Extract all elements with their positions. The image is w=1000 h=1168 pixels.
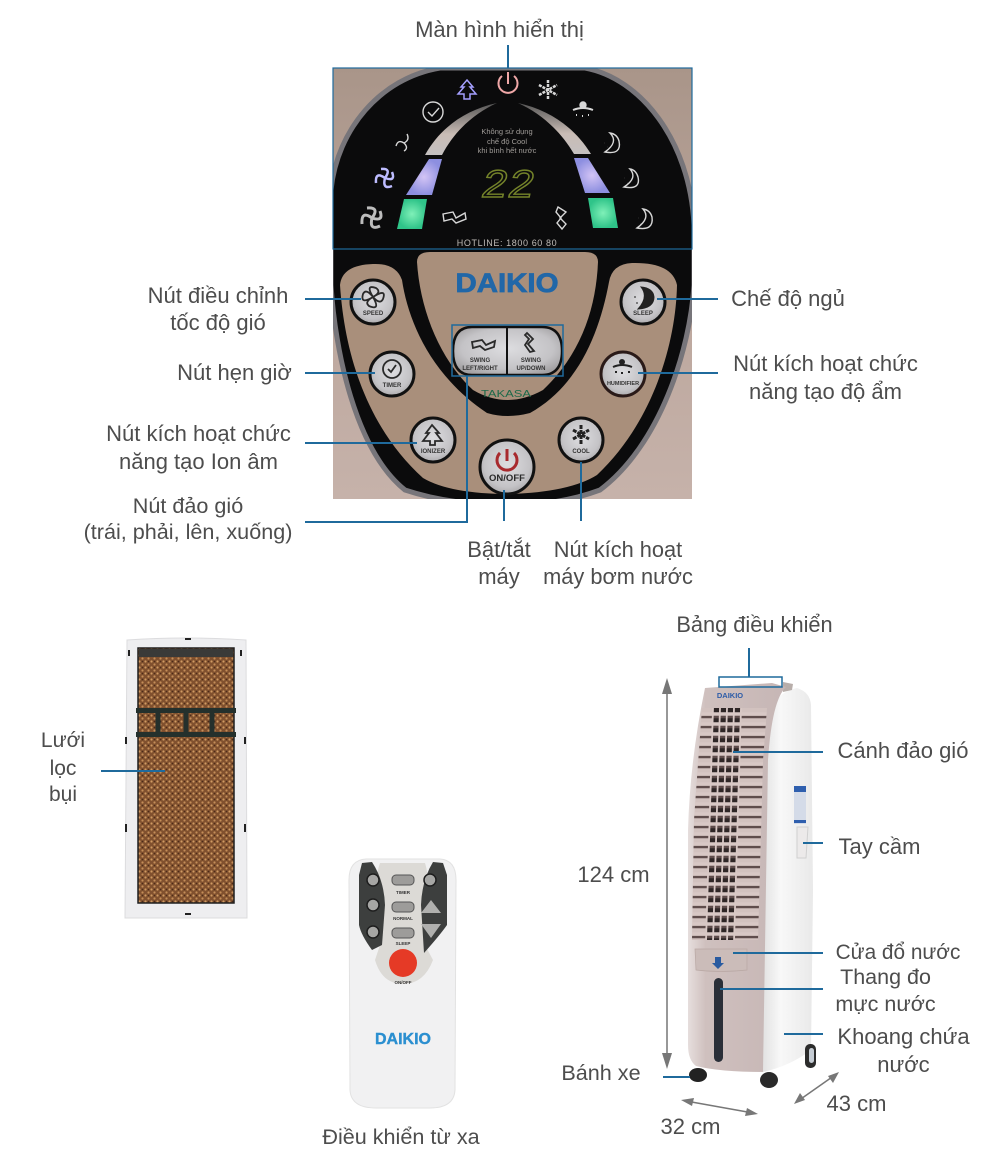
remote power key [389, 949, 417, 977]
button: swing pair [453, 327, 562, 375]
label: water door: Cửa đổ nước [836, 941, 960, 964]
filter frame [125, 638, 247, 918]
display arc: right green segment [588, 198, 618, 228]
width dimension arrow [681, 1098, 758, 1116]
remote center panel [375, 863, 433, 984]
black panel body [331, 68, 694, 505]
product: remote control [349, 859, 456, 1108]
label: ionizer button: Nút kích hoạt chức [106, 421, 291, 446]
label: fan speed button: tốc độ gió [170, 310, 266, 335]
remote logo: DAIKIO [375, 1031, 431, 1048]
label: water tank: Khoang chứa [837, 1024, 970, 1049]
label: swing buttons: Nút đảo gió [133, 493, 243, 518]
cooler white body [763, 688, 813, 1072]
label: water gauge: mực nước [835, 992, 936, 1016]
callout lines: air cooler [663, 648, 823, 1077]
remote key labels: SLEEP [396, 941, 410, 946]
icon: swing left right [443, 212, 466, 223]
depth dimension arrow [794, 1072, 839, 1104]
label: dust filter: bụi [49, 783, 77, 806]
callout lines: control panel [305, 45, 718, 522]
button: humidifier: HUMIDIFIER [607, 381, 639, 387]
panel background [333, 68, 692, 499]
icon: moon medium [624, 169, 638, 188]
height dimension arrow [662, 678, 672, 1069]
label: handle: Tay cầm [839, 834, 920, 859]
hotline: HOTLINE: 1800 60 80 [457, 238, 557, 248]
button: speed: SPEED [363, 311, 384, 317]
cooler grille [690, 705, 770, 945]
Daikio logo: DAIKIO [456, 268, 558, 298]
display note text [478, 128, 536, 153]
rear wheel [805, 1044, 816, 1068]
water level gauge [714, 978, 723, 1062]
button: sleep: SLEEP [633, 311, 653, 317]
dimension: depth: 43 cm [827, 1091, 886, 1116]
label: humidifier button: năng tạo độ ẩm [749, 379, 902, 404]
label: power button: Bật/tắt [467, 537, 531, 562]
icon: ionizer tree [458, 80, 476, 99]
icon: humidifier [573, 102, 593, 116]
display note text: khi bình hết nước [478, 146, 537, 155]
panel: control panel photo [331, 68, 694, 505]
filter top strip [139, 649, 233, 657]
remote bar keys [392, 875, 414, 938]
icon: fan high [362, 208, 381, 227]
carry handle [797, 827, 808, 858]
label: pump button: Nút kích hoạt [554, 537, 682, 562]
cooler top lip [783, 682, 793, 692]
button: swing pair: SWING [521, 358, 541, 364]
button: timer [370, 352, 414, 396]
label: swing blades: Cánh đảo gió [838, 738, 968, 763]
label: humidifier button: Nút kích hoạt chức [733, 351, 918, 376]
label: control board: Bảng điều khiển [676, 612, 833, 637]
display arc: left gray segment [425, 103, 497, 155]
remote key labels [393, 890, 413, 985]
label: water tank: nước [877, 1052, 930, 1077]
label: fan speed button: Nút điều chỉnh [148, 283, 288, 308]
title: display label: Màn hình hiển thị [415, 17, 584, 42]
remote key labels: NORMAL [393, 916, 413, 921]
front wheel [689, 1068, 707, 1082]
icon: snowflake [539, 80, 557, 100]
filter frame clips [126, 639, 245, 914]
remote arrow keys [421, 900, 441, 938]
middle wheel [760, 1072, 778, 1088]
callout line: filter [101, 770, 165, 772]
water door [695, 949, 747, 972]
button: ionizer [411, 418, 455, 462]
button: on off: ON/OFF [489, 473, 525, 484]
button: swing pair: SWING [470, 358, 490, 364]
label: wheels: Bánh xe [561, 1060, 641, 1085]
display note text: Không sử dụng [481, 127, 533, 136]
label: dust filter: lọc [50, 757, 76, 780]
label: power button: máy [478, 564, 520, 589]
water door arrow [712, 957, 724, 969]
button: swing pair: LEFT/RIGHT [462, 366, 498, 372]
remote key labels: TIMER [396, 890, 411, 895]
label: sleep button: Chế độ ngủ [731, 286, 845, 311]
dimension: width: 32 cm [661, 1114, 720, 1139]
label: dust filter: Lưới [41, 729, 85, 752]
temperature readout: 22 [482, 165, 534, 210]
icon: swing up down [556, 207, 566, 229]
remote round keys [367, 874, 436, 938]
icon: timer [423, 102, 443, 122]
button: timer: TIMER [383, 383, 402, 389]
display arc: left blue segment [406, 159, 442, 195]
button: ionizer: IONIZER [421, 449, 446, 455]
button: cool [559, 418, 603, 462]
dimension: height: 124 cm [577, 862, 650, 887]
label: swing buttons: (trái, phải, lên, xuống) [84, 519, 292, 544]
icon: fan medium [376, 169, 393, 187]
remote body [349, 859, 456, 1108]
icon: moon high [604, 133, 619, 153]
spec sticker [794, 786, 806, 824]
tan button plate [340, 263, 677, 494]
label: remote control: Điều khiển từ xa [322, 1124, 481, 1149]
cooler front [688, 683, 786, 1072]
icon: fan low [396, 134, 408, 151]
button: speed [351, 280, 395, 324]
display note text: chế độ Cool [487, 137, 527, 146]
filter mesh [138, 648, 234, 903]
product: dust filter [125, 638, 247, 918]
label: pump button: máy bơm nước [543, 564, 693, 589]
button: sleep [621, 280, 665, 324]
button: cool: COOL [572, 449, 590, 455]
label: water gauge: Thang đo [840, 965, 931, 989]
display arc: right gray segment [518, 103, 591, 154]
display arc: right blue segment [574, 158, 610, 193]
remote key labels: ON/OFF [394, 980, 412, 985]
Takasa logo: TAKASA [481, 388, 531, 400]
button: on off [480, 440, 534, 494]
label: ionizer button: năng tạo Ion âm [119, 449, 278, 474]
display arc: left green segment [397, 199, 427, 229]
remote left key pad [359, 862, 385, 950]
center brand plate [417, 252, 598, 400]
button: swing pair: UP/DOWN [516, 366, 546, 372]
icon: moon low [637, 209, 652, 229]
icon: power [499, 72, 518, 93]
cooler logo: DAIKIO [717, 691, 743, 700]
filter cross bars [136, 710, 236, 734]
product: air cooler [688, 682, 816, 1088]
label: timer button: Nút hẹn giờ [177, 360, 292, 385]
remote right key pad [421, 862, 447, 953]
button: humidifier [601, 352, 645, 396]
